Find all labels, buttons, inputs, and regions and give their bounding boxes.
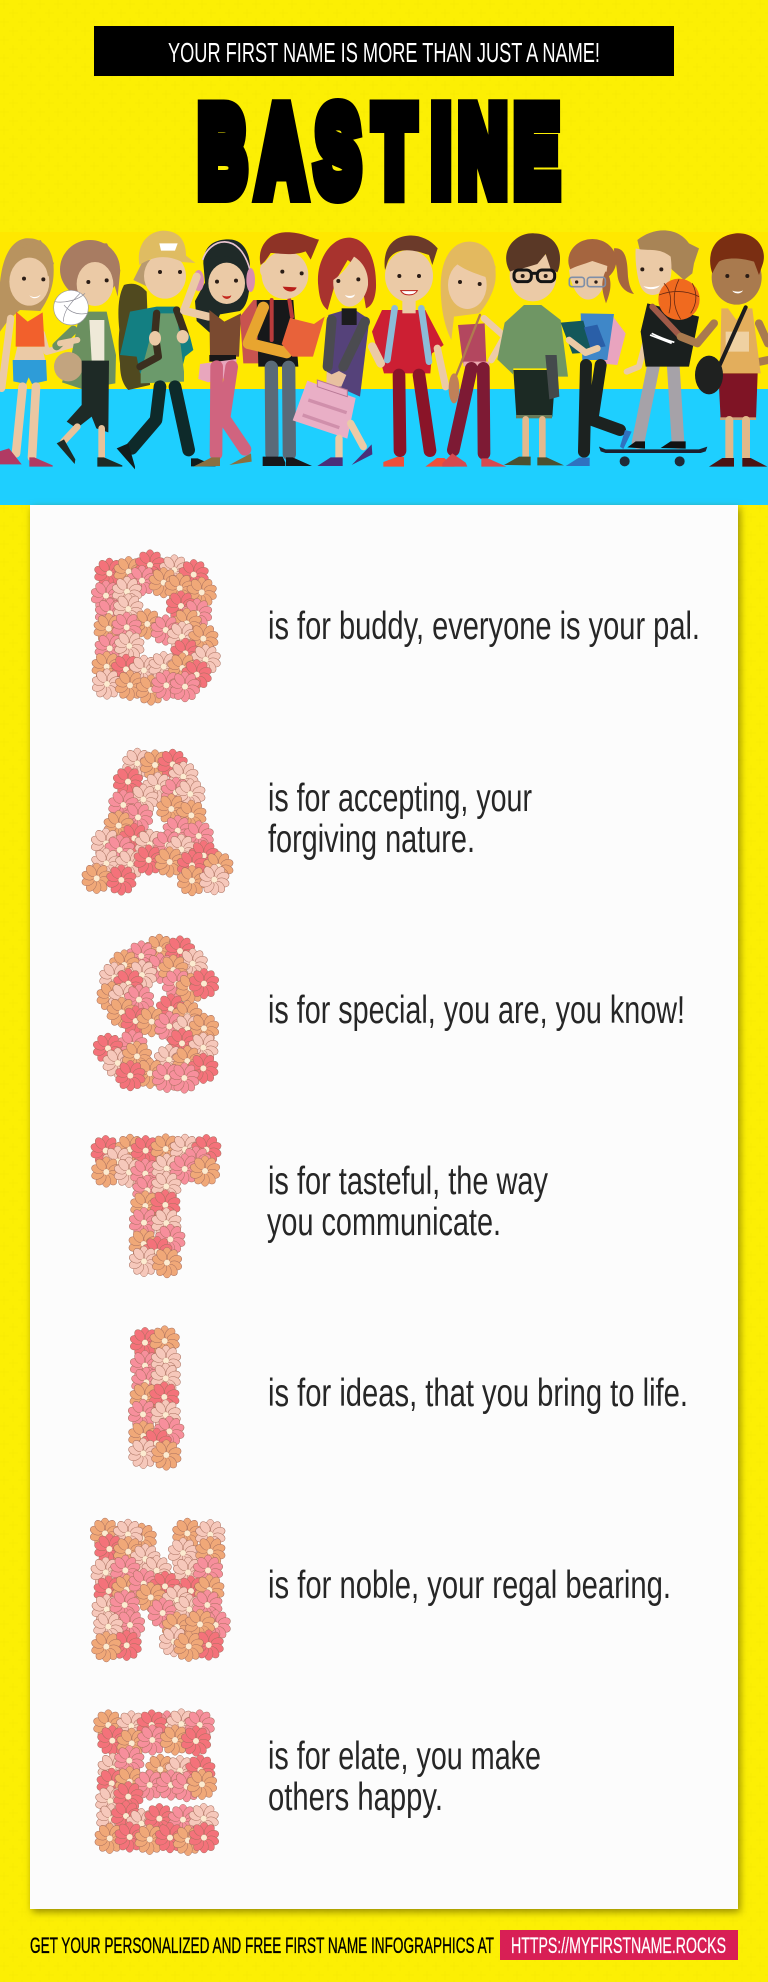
row T: text [267, 1160, 548, 1244]
person: boy with yellow cap and backpack [117, 231, 216, 469]
illustration: row of thirteen young people [0, 230, 768, 505]
title: name: BASTINE [199, 82, 559, 219]
row T: text: you communicate. [267, 1201, 501, 1244]
row E: text: others happy. [268, 1776, 443, 1819]
person: girl with ponytail and books [561, 239, 634, 466]
row T: text: is for tasteful, the way [268, 1160, 548, 1203]
person: skater boy with basketball [599, 230, 714, 466]
footer: call to action: GET YOUR PERSONALIZED AND FREE FIRST NAME INFOGRAPHICS AT [30, 1933, 494, 1958]
row E: flower letter [92, 1709, 220, 1856]
person: blonde girl with shoulder bag [441, 242, 506, 467]
person: girl with pink headphones [184, 239, 255, 467]
row N: flower letter [89, 1518, 232, 1662]
person: red-haired girl with pink bag [293, 238, 376, 466]
row T: flower letter [90, 1134, 222, 1278]
person: boy in green sweater with glasses [497, 233, 568, 465]
row E: text [268, 1735, 541, 1819]
person: curly-haired boy in jersey with black bag [695, 233, 768, 467]
row A: flower letter [81, 748, 234, 896]
row A: text: forgiving nature. [268, 818, 475, 861]
row E: text: is for elate, you make [268, 1735, 541, 1778]
row B: flower letter [90, 550, 222, 705]
person: boy reading red book [240, 232, 325, 466]
row A: text: is for accepting, your [268, 777, 532, 820]
person: girl in orange top [0, 238, 77, 467]
person: boy in red tee with blue backpack [372, 236, 454, 467]
person: girl in green jacket with volleyball [54, 240, 122, 467]
panel: white acrostic card [30, 505, 738, 1909]
row I: flower letter [127, 1326, 185, 1470]
row S: flower letter [92, 934, 220, 1093]
row A: text [268, 777, 532, 861]
banner: tagline [94, 26, 674, 76]
